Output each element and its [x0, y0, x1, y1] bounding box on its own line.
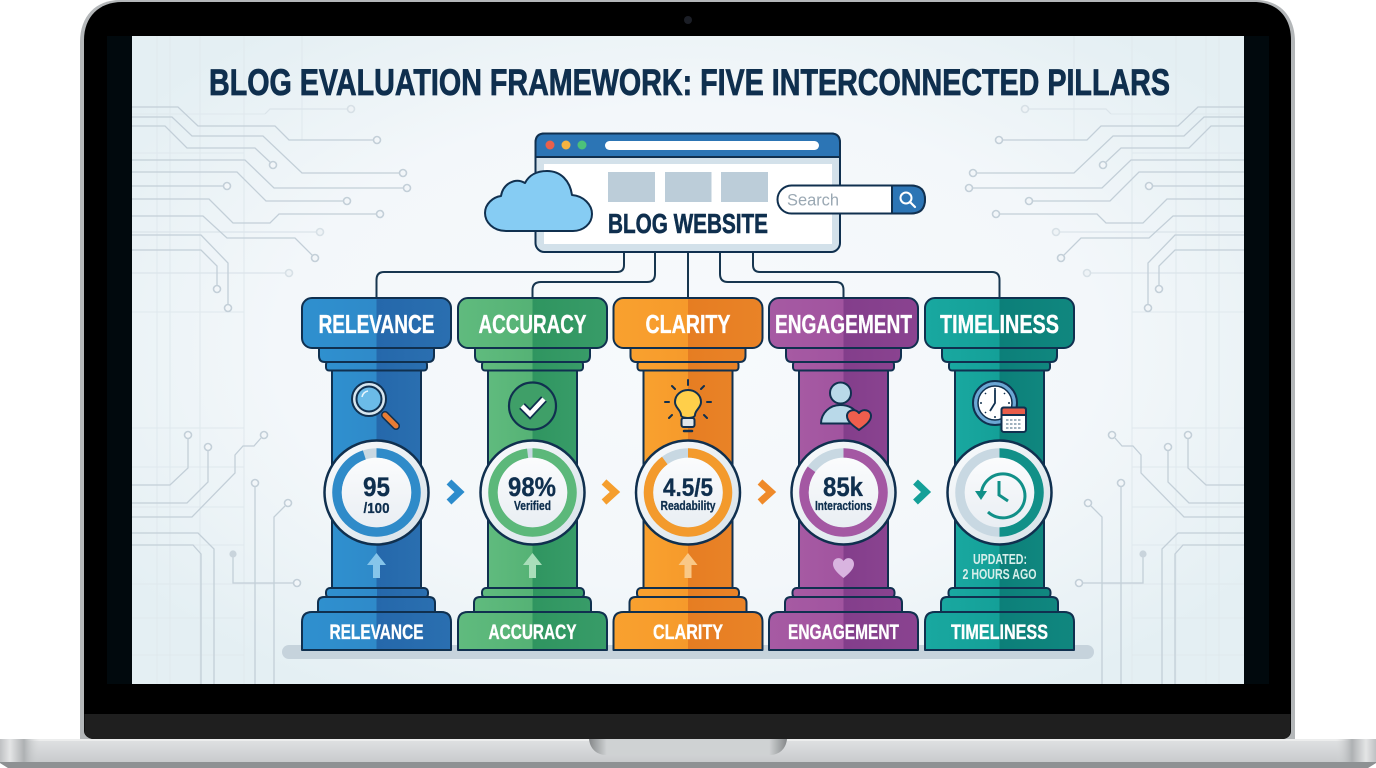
score gauge: 85k interactions — [792, 440, 896, 544]
pillar: clarity — [614, 298, 762, 650]
score gauge: 4.5/5 readability: Readability — [660, 498, 716, 513]
icon: user with heart — [821, 382, 871, 430]
update note — [962, 551, 1037, 583]
icon: heart — [833, 558, 854, 578]
heading: ACCURACY — [478, 309, 586, 339]
base label: CLARITY — [653, 620, 723, 644]
score gauge: 85k interactions: Interactions — [815, 498, 872, 513]
base platform — [282, 645, 1094, 659]
score gauge: 95/100: 95 — [363, 472, 390, 502]
base label: ENGAGEMENT — [788, 620, 899, 644]
search bar — [778, 186, 925, 214]
pillar structure — [302, 298, 451, 650]
arrow: clarity to engagement — [760, 482, 771, 502]
content placeholder blocks — [608, 172, 768, 202]
icon: up arrow — [367, 553, 386, 578]
score gauge: 98% verified: 98% — [508, 472, 556, 502]
heading: ENGAGEMENT — [775, 309, 912, 339]
pillar: timeliness — [925, 298, 1074, 650]
score gauge: 98% verified: Verified — [514, 498, 551, 513]
heading: TIMELINESS — [940, 309, 1059, 339]
blog website label: BLOG WEBSITE — [608, 208, 768, 239]
base label: TIMELINESS — [951, 620, 1048, 644]
update note: 2 HOURS AGO — [962, 566, 1037, 583]
icon: up arrow — [678, 553, 698, 578]
score gauge: 85k interactions: 85k — [823, 472, 864, 502]
score gauge: 4.5/5 readability — [636, 440, 740, 544]
score gauge: 95/100 — [324, 440, 428, 544]
icon: check mark — [509, 382, 556, 430]
heading: RELEVANCE — [318, 309, 434, 339]
arrow: engagement to timeliness — [916, 482, 926, 502]
icon: up arrow — [523, 553, 542, 578]
pillar structure — [925, 298, 1074, 650]
score gauge: 4.5/5 readability: 4.5/5 — [663, 474, 713, 502]
base label: ACCURACY — [488, 620, 576, 644]
connector lines from website to pillars — [376, 252, 1000, 298]
pillar: engagement — [769, 298, 918, 650]
heading: CLARITY — [646, 309, 730, 339]
arrow: accuracy to clarity — [604, 482, 615, 502]
icon: magnifying glass — [352, 382, 396, 426]
icon: clock and calendar — [973, 381, 1026, 432]
browser header bar — [536, 134, 840, 157]
pillar: relevance — [302, 298, 451, 650]
screen background — [132, 36, 1244, 684]
arrow: relevance to accuracy — [449, 482, 460, 502]
update note: UPDATED: — [973, 551, 1027, 568]
score gauge: 98% verified — [480, 440, 584, 544]
pillar structure — [614, 298, 762, 650]
search bar: Search — [787, 192, 839, 210]
icon: light bulb — [665, 380, 711, 431]
score gauge: 95/100: /100 — [364, 500, 390, 517]
icon: cloud — [485, 171, 592, 231]
pillar: accuracy — [458, 298, 607, 650]
blog website browser window — [536, 134, 840, 252]
pillar structure — [458, 298, 607, 650]
pillar structure — [769, 298, 918, 650]
gauge: history clock — [948, 440, 1052, 544]
base label: RELEVANCE — [330, 620, 424, 644]
